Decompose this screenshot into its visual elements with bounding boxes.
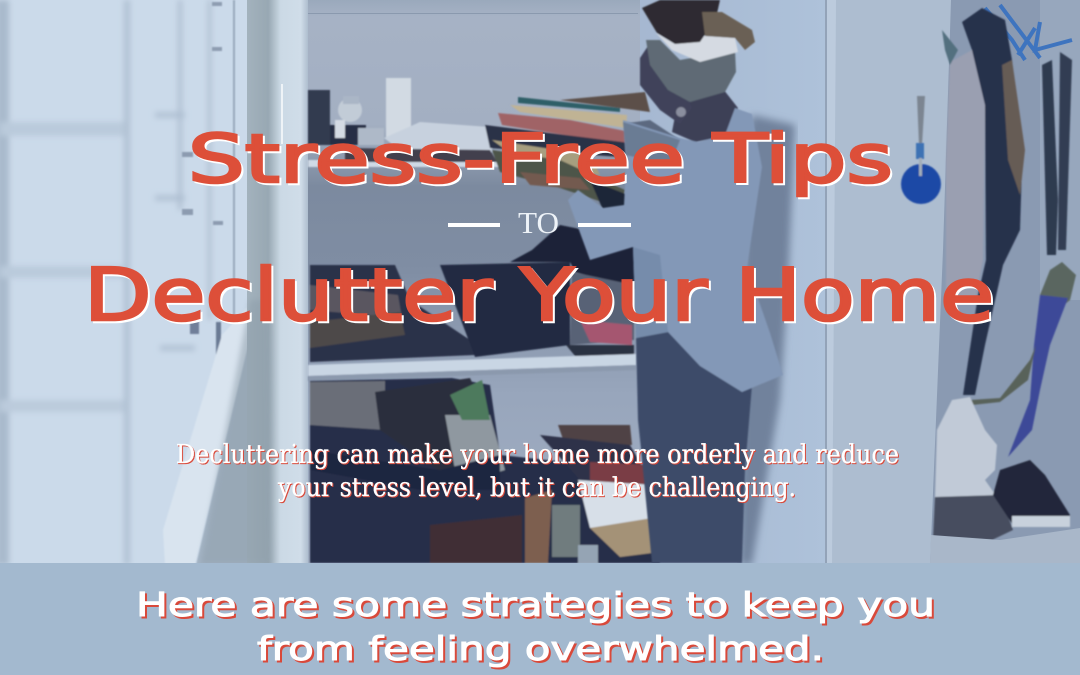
intro paragraph: your stress level, but it can be challenging. <box>277 473 796 503</box>
band text: Here are some strategies to keep you <box>136 585 935 624</box>
neck and shoulders <box>672 85 738 142</box>
woman <box>568 0 783 563</box>
ear <box>676 107 686 117</box>
connector: TO: TO <box>518 205 559 240</box>
hair and scarf <box>642 0 720 44</box>
band text <box>136 585 935 668</box>
face <box>640 40 692 124</box>
door post <box>247 0 308 565</box>
middle shelf items <box>308 225 638 381</box>
sweater <box>568 108 783 392</box>
bag <box>935 397 997 500</box>
window shutters <box>0 0 256 565</box>
top shelf with items <box>308 78 680 212</box>
intro paragraph: Decluttering can make your home more orderly and reduce <box>176 440 899 470</box>
band text: from feeling overwhelmed. <box>257 629 824 668</box>
bottom band <box>0 563 1080 675</box>
title: Declutter Your Home: Declutter Your Home <box>84 253 994 337</box>
right closet <box>930 0 1080 565</box>
hangers <box>985 5 1072 60</box>
folded clothes stack <box>518 97 620 112</box>
hanging clothes <box>933 8 1076 540</box>
door panel <box>825 0 951 565</box>
head wrap <box>646 40 736 102</box>
sleeve shading <box>623 122 680 165</box>
closet wall <box>640 0 830 565</box>
keychain <box>901 96 941 204</box>
bottom shelf items <box>310 378 660 563</box>
closet interior back wall <box>308 0 643 565</box>
connector: TO <box>448 205 631 240</box>
jeans <box>636 325 752 563</box>
title: Stress-Free Tips: Stress-Free Tips <box>188 120 893 198</box>
intro paragraph <box>176 440 899 503</box>
